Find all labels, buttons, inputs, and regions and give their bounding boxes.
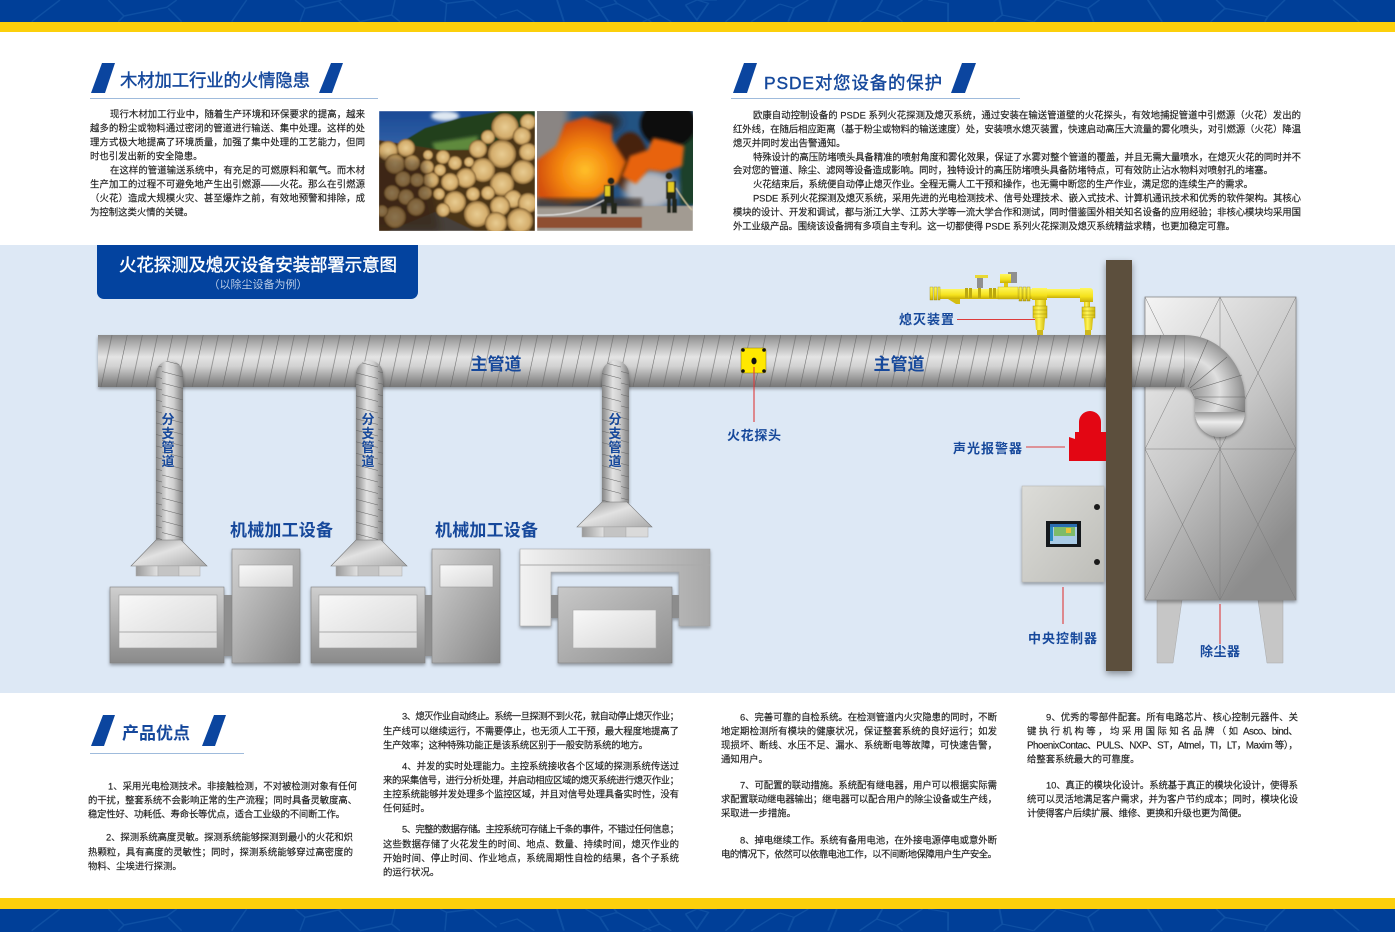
panel title: installation deployment diagram: 火花探测及熄灭设备安装部署示意图 [119,255,397,275]
label: branch duct 3: 支 [608,426,622,441]
callout: spark detector [727,367,781,443]
text block: wood processing fire hazards: 在这样的管道输送系统中，有充足的可燃原料和氧气。而木材 [110,164,365,176]
text column: advantages 9-10: PhoenixContac、PULS、NXP、ST，Atmel，TI，LT，Maxim 等）， [1027,738,1298,752]
text column: advantages 3-5: 生产线可以继续运行，不需要停止，也无须人工干预，最大程度地提高了 [383,726,679,736]
text column: advantages 9-10: 统可以灵活地满足客户需求，并为客户节约成本；同时，模块化设 [1027,794,1299,804]
hood 3 [577,502,652,537]
text column: advantages 6-8 [721,712,998,860]
text column: advantages 9-10: 9、优秀的零部件配套。所有电路芯片、核心控制元器件、关 [1046,712,1298,722]
text column: advantages 6-8: 现损坏、断线、水压不足、漏水、系统断电等故障，可快速告警， [721,740,997,750]
text block: wood processing fire hazards: 理方式极大地提高了环境质量，加强了集中处理的工艺能力，但同 [90,136,365,148]
branch duct 3 [602,360,629,503]
label: main duct 1: 主管道 [470,354,522,374]
callout: sound and light alarm [953,441,1065,456]
callout: extinguishing device [899,312,1035,327]
text block: PSDE equipment protection: 模块的设计、开发和调试，都与浙江大学、江苏大学等一流大学合作和测试，同时借鉴国外相关知名设备的应用经验；非核心模块均采用国 [733,206,1301,218]
label: branch duct 1 [161,412,175,469]
text column: advantages 9-10: Asco、bind、 [1243,726,1298,738]
label: branch duct 2 [361,412,375,469]
text column: advantages 1-2: 1、采用光电检测技术。非接触检测，不对被检测对象有任何 [108,780,358,792]
label: machining equipment 1: 机械加工设备 [230,520,333,540]
text block: PSDE equipment protection: 熄灭并同时发出告警通知。 [733,138,846,148]
text column: advantages 3-5: 开始时间、停止时间、作业地点，系统周期性自检的结果，各个子系统 [383,852,679,864]
photo: stacked timber logs [370,111,538,234]
label: branch duct 2: 支 [361,426,375,441]
text block: wood processing fire hazards: 时也引发出新的安全隐患。 [90,150,203,162]
text column: advantages 6-8: 采取进一步措施。 [721,808,796,818]
text column: advantages 3-5: 任何延时。 [383,802,430,814]
branch duct 1 [156,360,183,541]
callout: spark detector: 火花探头 [727,428,781,443]
heading: wood processing fire hazards: 木材加工行业的火情隐患 [120,70,310,90]
text column: advantages 1-2 [88,780,358,872]
main duct with elbow into the dust collector [98,335,1245,437]
text block: wood processing fire hazards: （火花）造成大规模火灾、甚至爆炸之前，有效地预警和排除，成 [90,192,365,204]
text column: advantages 9-10: 键执行机构等，均采用国际知名品牌（如 [1027,726,1238,736]
text column: advantages 3-5: 主控系统能够并发处理多个监控区域，并且对信号处理具备实时性，没有 [383,788,679,800]
text column: advantages 9-10: 计使得客户后续扩展、维修、更换和升级也更为简便。 [1027,808,1247,818]
panel title: installation deployment diagram: （以除尘设备为例） [208,277,308,291]
machine 3 with arch frame [520,549,710,663]
panel: installation diagram background [0,245,1395,693]
panel title: installation deployment diagram [97,245,418,299]
text column: advantages 6-8: 7、可配置的联动措施。系统配有继电器，用户可以根据实际需 [740,780,997,790]
text column: advantages 1-2: 稳定性好、功耗低、寿命长等优点，适合工业级的不间断工作。 [88,808,345,820]
wall column [1106,260,1132,671]
label: branch duct 1: 分 [161,412,175,427]
callout: central controller: 中央控制器 [1028,631,1097,646]
text block: wood processing fire hazards: 为控制这类火情的关键。 [90,206,193,218]
text column: advantages 6-8: 6、完善可靠的自检系统。在检测管道内火灾隐患的同时，不断 [740,712,997,722]
text block: PSDE equipment protection: 火花结束后，系统便自动停止熄灭作业。全程无需人工干预和操作，也无需中断您的生产作业，满足您的连续生产的需求。 [753,178,1253,190]
text column: advantages 6-8: 求配置联动继电器输出；继电器可以配合用户的除尘设备或生产线， [721,794,997,804]
text block: wood processing fire hazards: 生产加工的过程不可避免地产生出引燃源——火花。那么在引燃源 [90,178,366,190]
text column: advantages 6-8: 地定期检测所有模块的健康状况，保证整套系统的良好运行；如发 [721,726,998,736]
icon: sound and light alarm [1069,411,1106,461]
heading: product advantages: 产品优点 [122,724,190,743]
text column: advantages 3-5: 生产效率；这种特殊功能正是该系统区别于一般安防系统的地方。 [383,740,648,750]
heading: product advantages [90,715,244,754]
text block: PSDE equipment protection: 红外线，在随后相应距离（基于粉尘或物料的输送速度）处，安装喷水熄灭装置，快速启动高压大流量的雾化喷头，对引燃源（火花）降温 [733,124,1301,134]
text block: wood processing fire hazards: 越多的粉尘或物料通过密闭的管道进行输送、集中处理。这样的处 [90,122,366,134]
label: main duct 2: 主管道 [874,354,924,374]
text column: advantages 9-10: 给整套系统最大的可靠度。 [1027,754,1140,764]
text column: advantages 1-2: 物料、尘埃进行探测。 [88,860,182,872]
bottom footer band [0,898,1395,932]
label: branch duct 3 [608,412,622,469]
dust collector [1145,297,1296,663]
text column: advantages 3-5: 的运行状况。 [383,866,439,878]
text block: wood processing fire hazards [90,108,366,218]
text column: advantages 9-10 [1027,712,1299,818]
callout: dust collector: 除尘器 [1200,644,1240,659]
hood 2 [331,540,407,576]
label: branch duct 1: 管 [161,440,175,455]
heading: wood processing fire hazards [90,63,378,99]
hood 1 [131,540,207,576]
central controller cabinet [1022,486,1104,582]
text column: advantages 1-2: 热颗粒，具有高度的灵敏性；同时，探测系统能够穿过高密度的 [88,846,353,858]
text column: advantages 9-10: 10、真正的模块化设计。系统基于真正的模块化设计，使得系 [1046,780,1298,790]
machine 1 [110,549,300,663]
text column: advantages 1-2: 的干扰，整套系统不会影响正常的生产流程；同时具备灵敏度高、 [88,794,357,806]
callout: central controller [1028,587,1097,646]
text column: advantages 1-2: 2、探测系统高度灵敏。探测系统能够探测到最小的火花和炽 [106,832,353,842]
callout: dust collector [1200,604,1240,659]
top header band [0,0,1395,32]
text column: advantages 3-5: 5、完整的数据存储。主控系统可存储上千条的事件，不错过任何信息； [402,824,679,834]
text block: PSDE equipment protection: 欧康自动控制设备的 PSDE 系列火花探测及熄灭系统，通过安装在输送管道壁的火花探头，有效地捕捉管道中引燃源（火花）发出的 [753,110,1301,120]
label: branch duct 1: 道 [161,454,175,469]
icon: spark detector [741,348,766,373]
label: branch duct 3: 道 [608,454,622,469]
label: branch duct 2: 管 [361,440,375,455]
callout: sound and light alarm: 声光报警器 [953,441,1022,456]
text column: advantages 3-5: 4、并发的实时处理能力。主控系统接收各个区域的探测系统传送过 [402,760,680,772]
text block: PSDE equipment protection: 外工业级产品。围绕该设备拥有多项自主专利。这一切都使得 PSDE 系列火花探测及熄灭系统精益求精，也更加稳定可靠。 [733,220,1235,232]
label: machining equipment 2: 机械加工设备 [435,520,538,540]
text column: advantages 3-5: 3、熄灭作业自动终止。系统一旦探测不到火花，就自动停止熄灭作业； [402,710,679,722]
text column: advantages 3-5 [383,710,680,878]
text block: PSDE equipment protection: 特殊设计的高压防堵喷头具备精准的喷射角度和雾化效果，保证了水雾对整个管道的覆盖，并且无需大量喷水，在熄灭火花的同时并不 [753,152,1301,162]
heading: PSDE equipment protection [731,63,1020,99]
label: branch duct 3: 分 [608,412,622,427]
machine 2 [311,549,500,663]
heading: PSDE equipment protection: PSDE对您设备的保护 [764,73,942,93]
extinguishing device [930,272,1095,335]
label: branch duct 2: 道 [361,454,375,469]
text block: PSDE equipment protection: PSDE 系列火花探测及熄灭系统，采用先进的光电检测技术、信号处理技术、嵌入式技术、计算机通讯技术和优秀的软件架构。其核心 [753,192,1302,204]
text block: PSDE equipment protection [733,110,1302,232]
callout: extinguishing device: 熄灭装置 [899,312,954,327]
text column: advantages 3-5: 这些数据存储了火花发生的时间、地点、数量、持续时间，熄灭作业的 [383,838,679,850]
photo: firefighters at a large blaze [537,111,693,231]
text column: advantages 6-8: 通知用户。 [721,754,768,764]
text column: advantages 6-8: 电的情况下，依然可以依靠电池工作，以不间断地保障用户生产安全。 [721,848,997,860]
text column: advantages 3-5: 来的采集信号，进行分析处理，并启动相应区域的熄灭系统进行熄灭作业； [383,774,679,786]
text block: PSDE equipment protection: 会对您的管道、除尘、滤网等设备造成影响。同时，独特设计的高压防堵喷头具备防堵特点，可有效防止沾水物料对喷射孔的堵塞。 [733,164,1273,176]
text column: advantages 6-8: 8、掉电继续工作。系统有备用电池，在外接电源停电或意外断 [740,834,997,846]
label: branch duct 2: 分 [361,412,375,427]
label: branch duct 3: 管 [608,440,622,455]
branch duct 2 [356,360,383,541]
label: branch duct 1: 支 [161,426,175,441]
text block: wood processing fire hazards: 现行木材加工行业中，随着生产环境和环保要求的提高，越来 [110,108,366,120]
